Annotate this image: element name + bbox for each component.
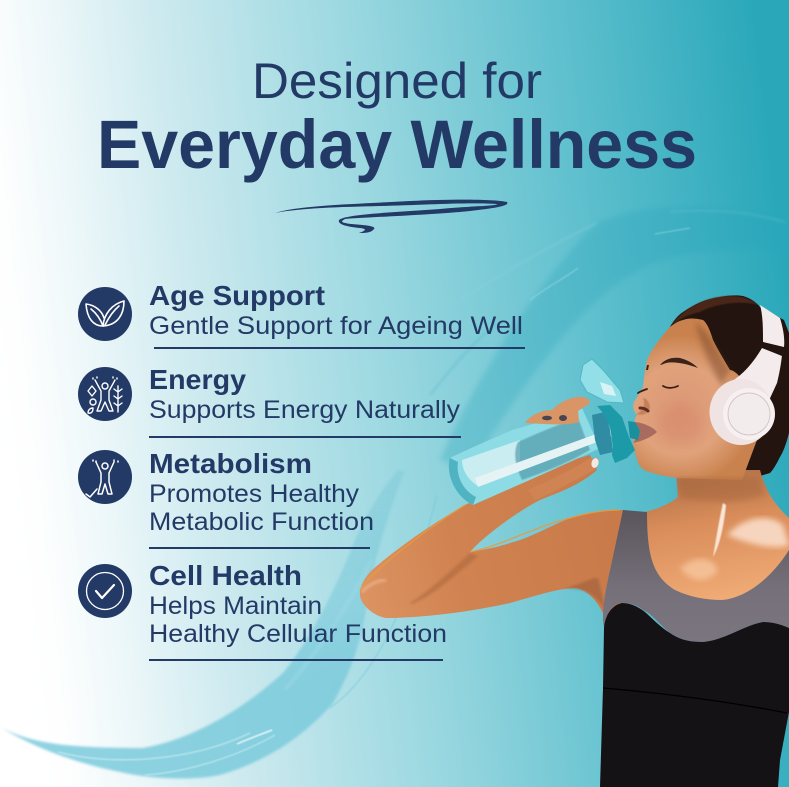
title [97,53,697,183]
arm [360,455,625,618]
benefit: energy: Energy [149,364,246,395]
bottle [449,359,640,505]
tank top grey panel [603,510,789,642]
benefit: cell health: Healthy Cellular Function [149,620,447,648]
neck shadow [678,478,765,502]
nose shadow [636,398,650,415]
hand fingers [525,397,600,500]
face [633,318,757,480]
bottle lid [580,359,624,403]
eyebrow [646,358,698,370]
bottle mouthpiece [628,421,640,440]
benefit: energy [78,364,461,438]
headphones ear cup [710,379,775,445]
benefit: cell health: Helps Maintain [149,592,322,620]
benefit: metabolism: Promotes Healthy [149,480,360,508]
benefit: cell health: Cell Health [149,560,302,591]
benefit: age support [78,280,525,349]
lips [633,422,657,443]
hairline shadow [695,322,730,385]
benefit: age support: Age Support [149,280,325,311]
title: Designed for [252,53,542,109]
bottle body [450,408,600,505]
arm orange rim light [360,505,620,590]
woman drinking from bottle [360,295,789,787]
bottle straw [475,429,613,487]
icon: badge check [78,564,132,618]
headphones band [725,305,784,420]
hair behind head [670,295,789,476]
headphones strap [762,342,784,356]
brush swoosh: upper right [430,206,789,470]
bottle shading [515,418,590,480]
bottle light panel [462,440,520,486]
benefit: age support: Gentle Support for Ageing Well [149,312,523,340]
bottle cap window [592,412,613,455]
benefit: metabolism: Metabolic Function [149,508,374,536]
neck highlights [680,503,789,580]
arm crease and elbow [362,553,606,612]
benefit: energy: Supports Energy Naturally [149,396,461,424]
benefit: metabolism: Metabolism [149,448,312,479]
cheek blush [658,405,702,445]
hair rim [670,296,758,327]
title underline scribble [275,200,507,233]
tank top black panel [600,603,789,787]
closed eyes and nostril [638,386,678,411]
benefit: cell health [78,560,447,661]
icon: person with plants [78,367,132,421]
benefit list [78,280,525,661]
benefit: metabolism [78,448,374,549]
icon: person with check [78,450,132,504]
tank top seam [603,688,787,713]
neck and chest skin [640,470,789,605]
title: Everyday Wellness [97,106,697,183]
bottle base [449,458,476,505]
icon: leaves [78,287,132,341]
bottle lid highlight [600,382,616,396]
bottle cap ring [597,405,635,463]
brush swoosh: lower left [2,470,437,779]
